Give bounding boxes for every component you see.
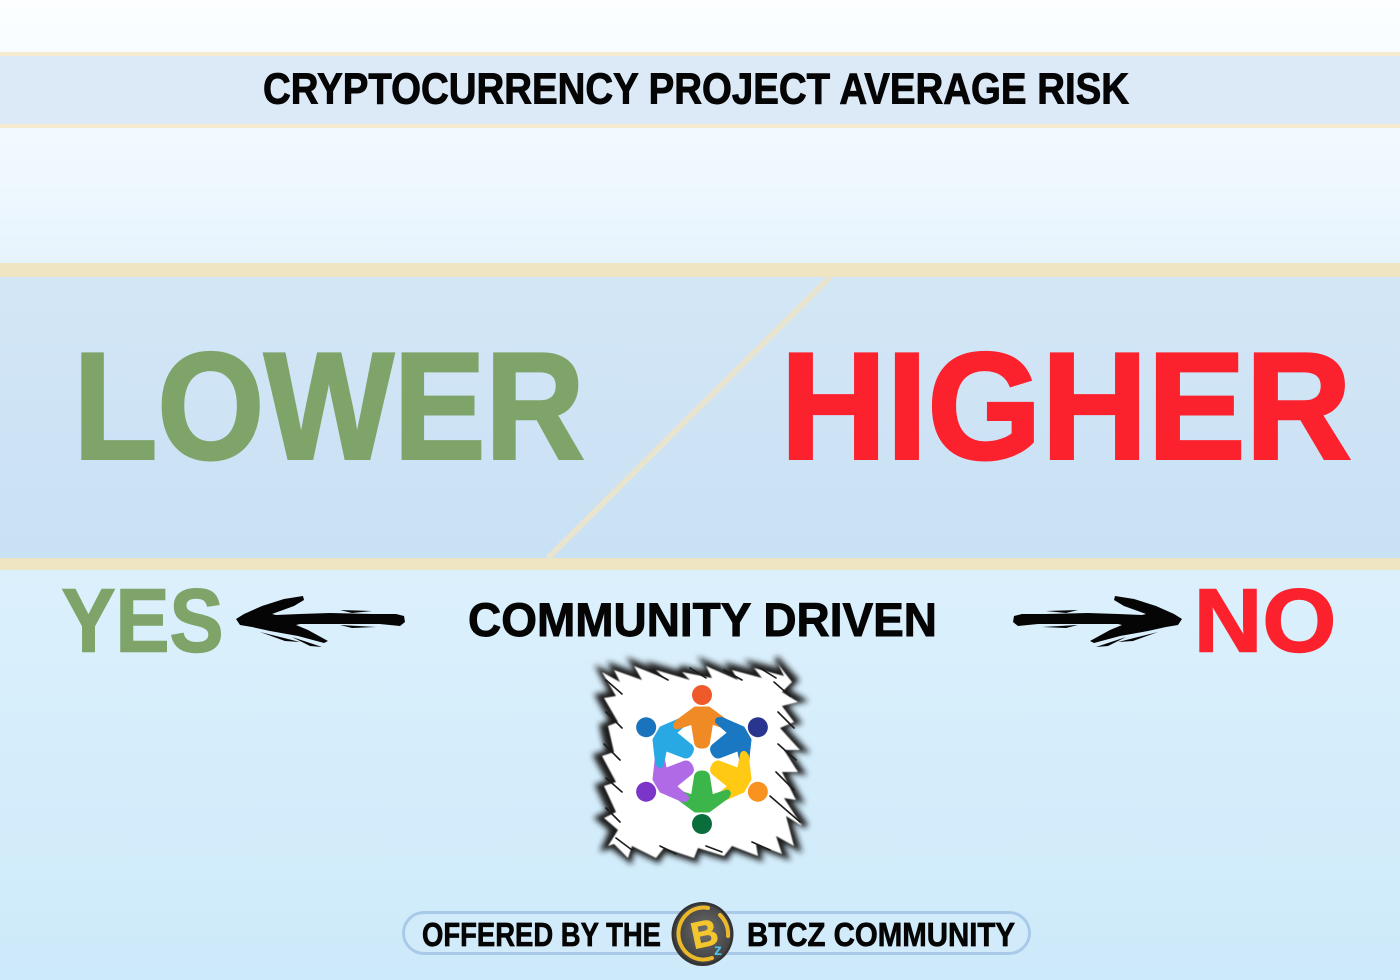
person: orange arm overlap [674, 708, 702, 728]
arrow: left to yes [236, 596, 405, 647]
label: yes: YES [62, 572, 224, 672]
panel: lower / higher risk band [0, 263, 1400, 570]
footer badge [404, 902, 1030, 966]
person: purple (lower left) [624, 741, 705, 821]
person: light blue (upper left) [624, 698, 705, 778]
label: higher: HIGHER [780, 322, 1352, 492]
person: dark blue (upper right) [699, 698, 780, 778]
title band [0, 52, 1400, 128]
label: lower: LOWER [74, 322, 584, 492]
icon: BTCZ coin: B [687, 911, 722, 957]
background: top section [0, 0, 1400, 264]
icon: community logo with torn edge [596, 658, 806, 860]
icon: BTCZ coin [672, 902, 734, 966]
title: CRYPTOCURRENCY PROJECT AVERAGE RISK [263, 64, 1129, 114]
label: no: NO [1194, 572, 1336, 672]
person: orange (top) [674, 685, 730, 748]
background: bottom section [0, 568, 1400, 980]
icon: BTCZ coin: z [714, 942, 722, 959]
footer text: offered by the: OFFERED BY THE [422, 916, 661, 953]
person: yellow (lower right) [699, 741, 780, 821]
diagonal divider [548, 277, 830, 558]
footer text: btcz community: BTCZ COMMUNITY [747, 916, 1015, 953]
torn edge streaks [604, 668, 800, 854]
label: community driven: COMMUNITY DRIVEN [468, 593, 937, 646]
person: green (bottom) [674, 772, 730, 834]
arrow: right to no [1013, 596, 1182, 647]
